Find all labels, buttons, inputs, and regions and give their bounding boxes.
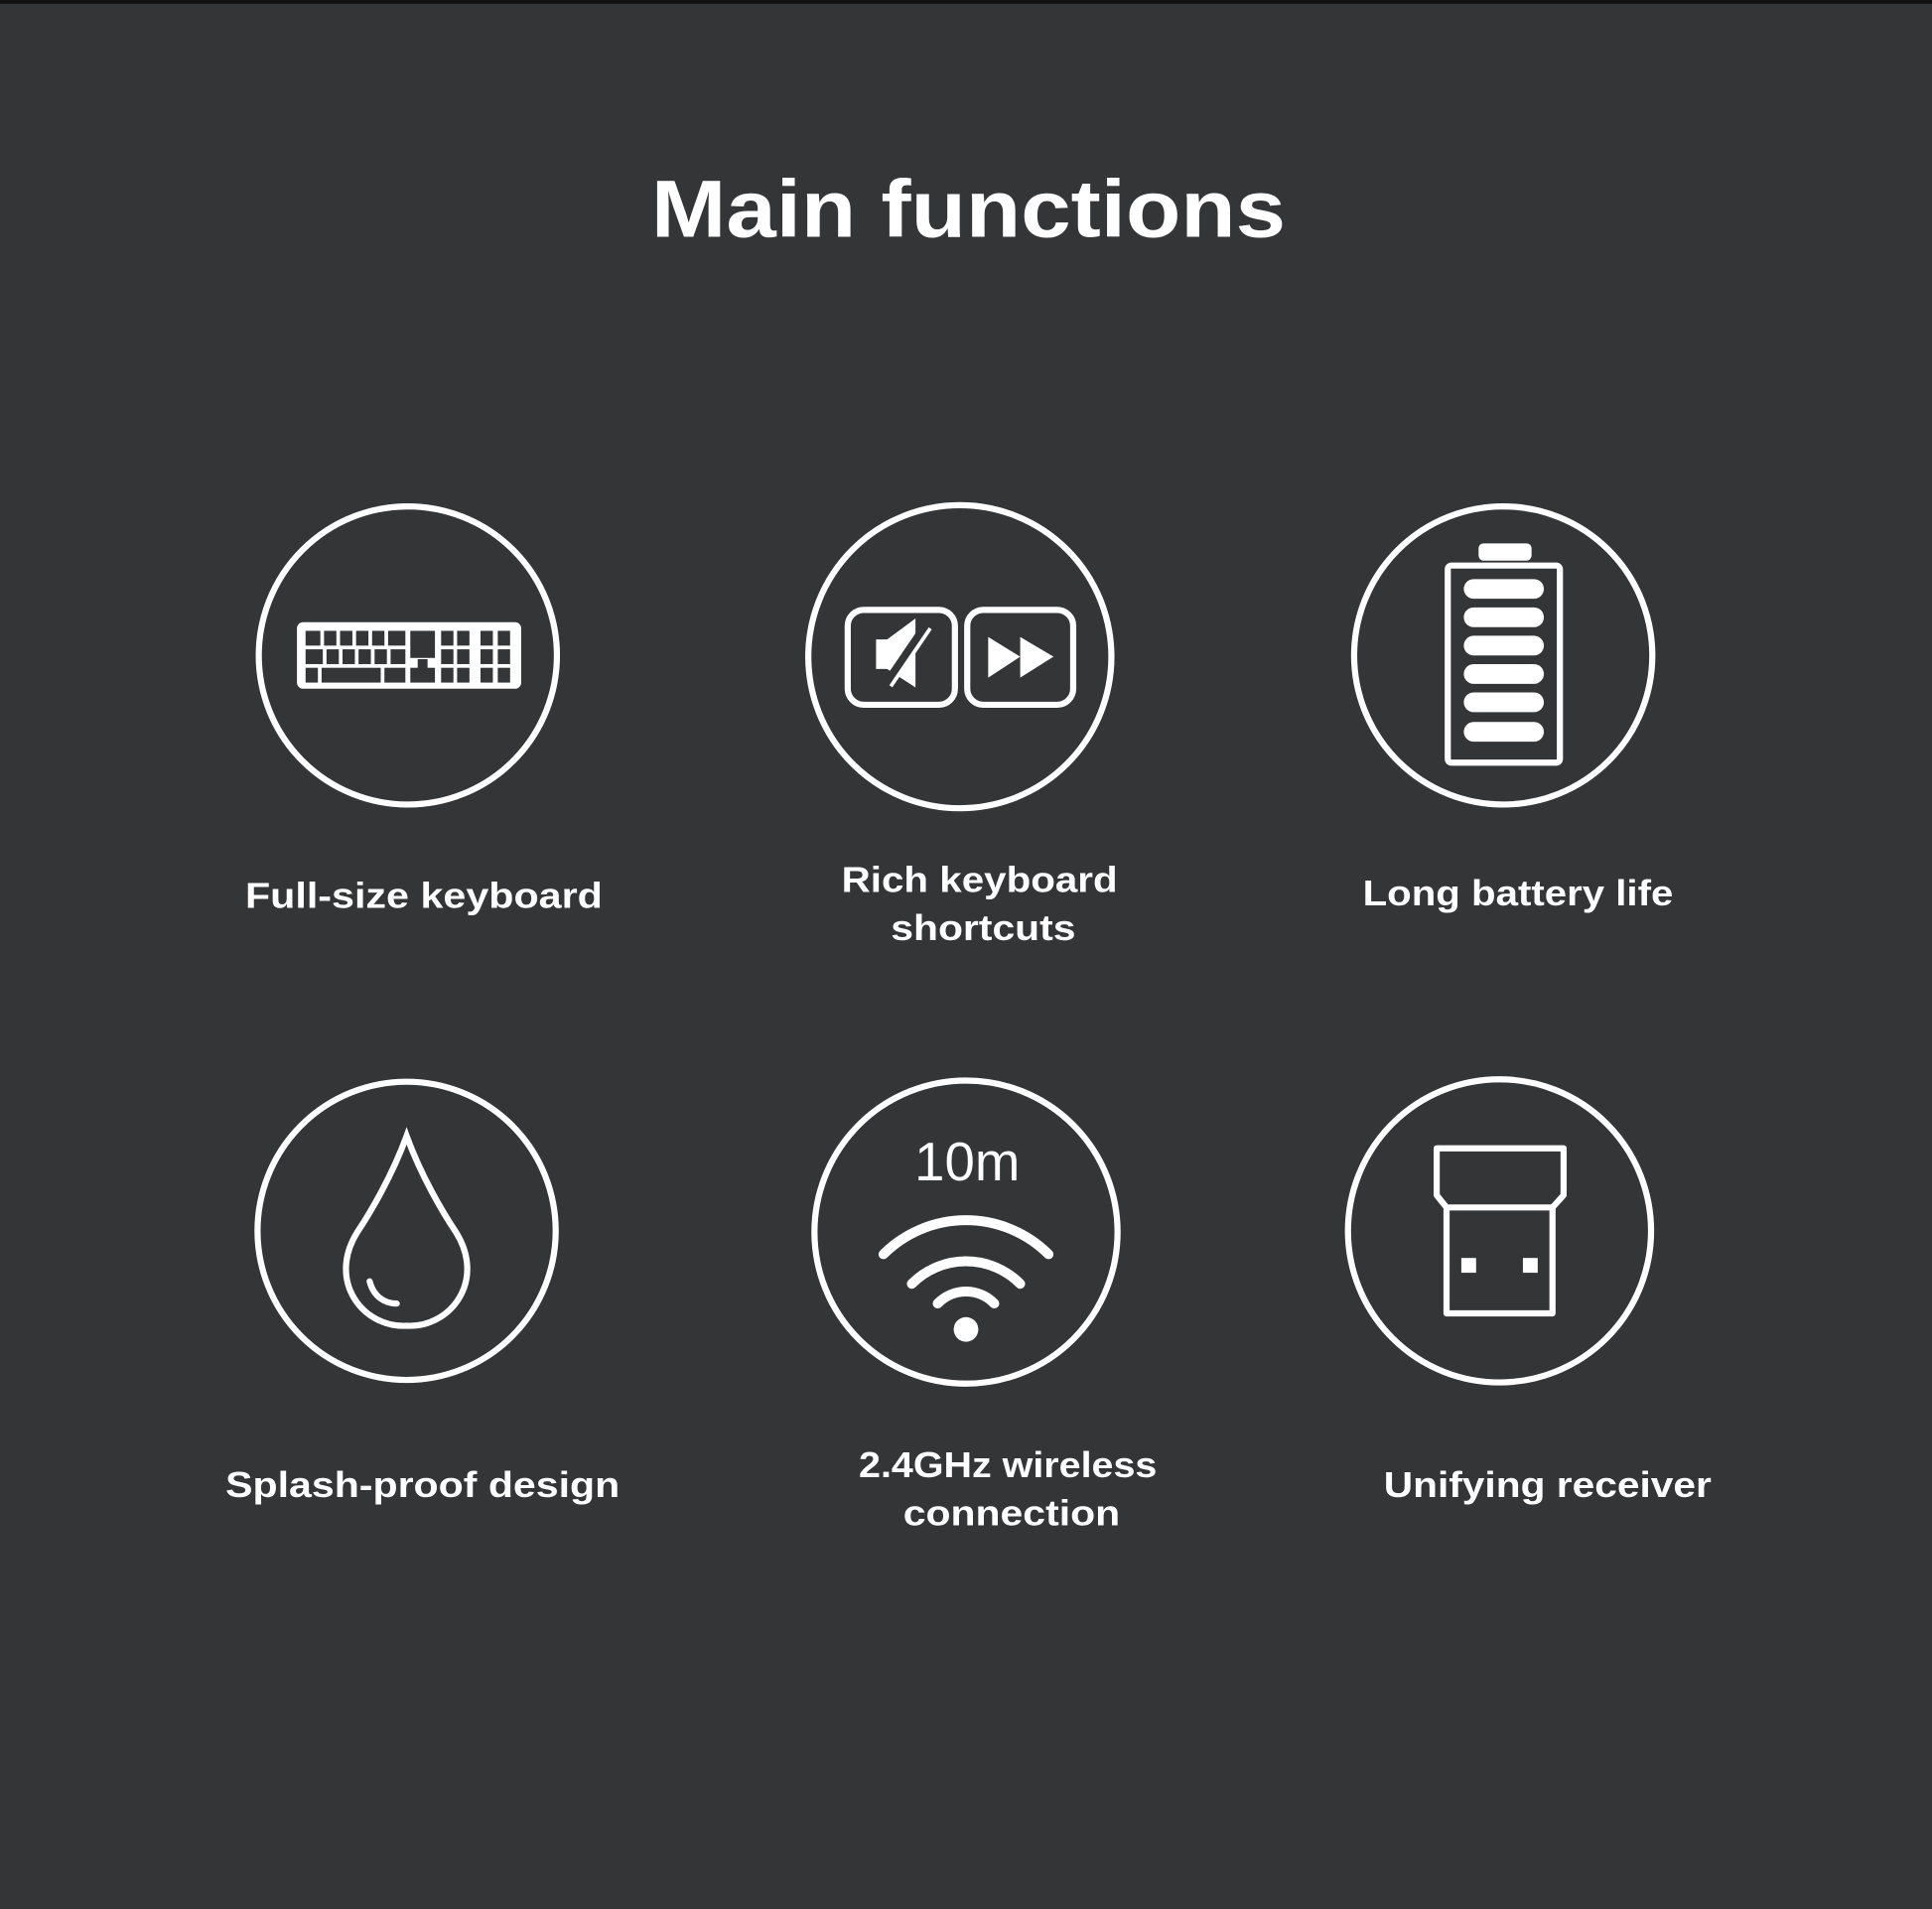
icon: wifi 10m: 10m <box>914 1132 1020 1192</box>
icon: battery circle <box>1354 506 1652 804</box>
label: battery: Long battery life <box>1363 873 1673 913</box>
panel: splash-proof <box>225 1082 620 1505</box>
panel: wireless: connection <box>903 1493 1120 1534</box>
label: receiver: Unifying receiver <box>1384 1464 1712 1505</box>
icon: drop circle <box>257 1082 556 1380</box>
panel: wireless <box>814 1080 1157 1534</box>
label: full-size keyboard: Full-size keyboard <box>245 876 603 916</box>
icon: water drop <box>345 1136 468 1326</box>
panel: shortcuts <box>808 505 1118 948</box>
panel: full-size keyboard <box>245 506 603 916</box>
icon: usb receiver <box>1437 1149 1564 1313</box>
title: Main functions <box>651 164 1286 254</box>
panel: shortcuts: shortcuts <box>891 907 1075 948</box>
icon: shortcuts circle <box>808 505 1111 808</box>
label: shortcuts: Rich keyboard <box>842 860 1118 900</box>
icon: keyboard circle <box>259 506 557 804</box>
icon: mute and fast-forward keys <box>848 610 1073 705</box>
icon: wireless circle <box>814 1080 1118 1384</box>
icon: wifi 10m <box>884 1132 1048 1342</box>
panel: battery <box>1354 506 1673 913</box>
label: wireless: 2.4GHz wireless <box>859 1444 1157 1485</box>
icon: battery <box>1448 543 1560 762</box>
panel: receiver <box>1348 1079 1712 1505</box>
label: splash-proof: Splash-proof design <box>225 1464 620 1505</box>
icon: keyboard <box>297 622 521 689</box>
icon: receiver circle <box>1348 1079 1651 1383</box>
